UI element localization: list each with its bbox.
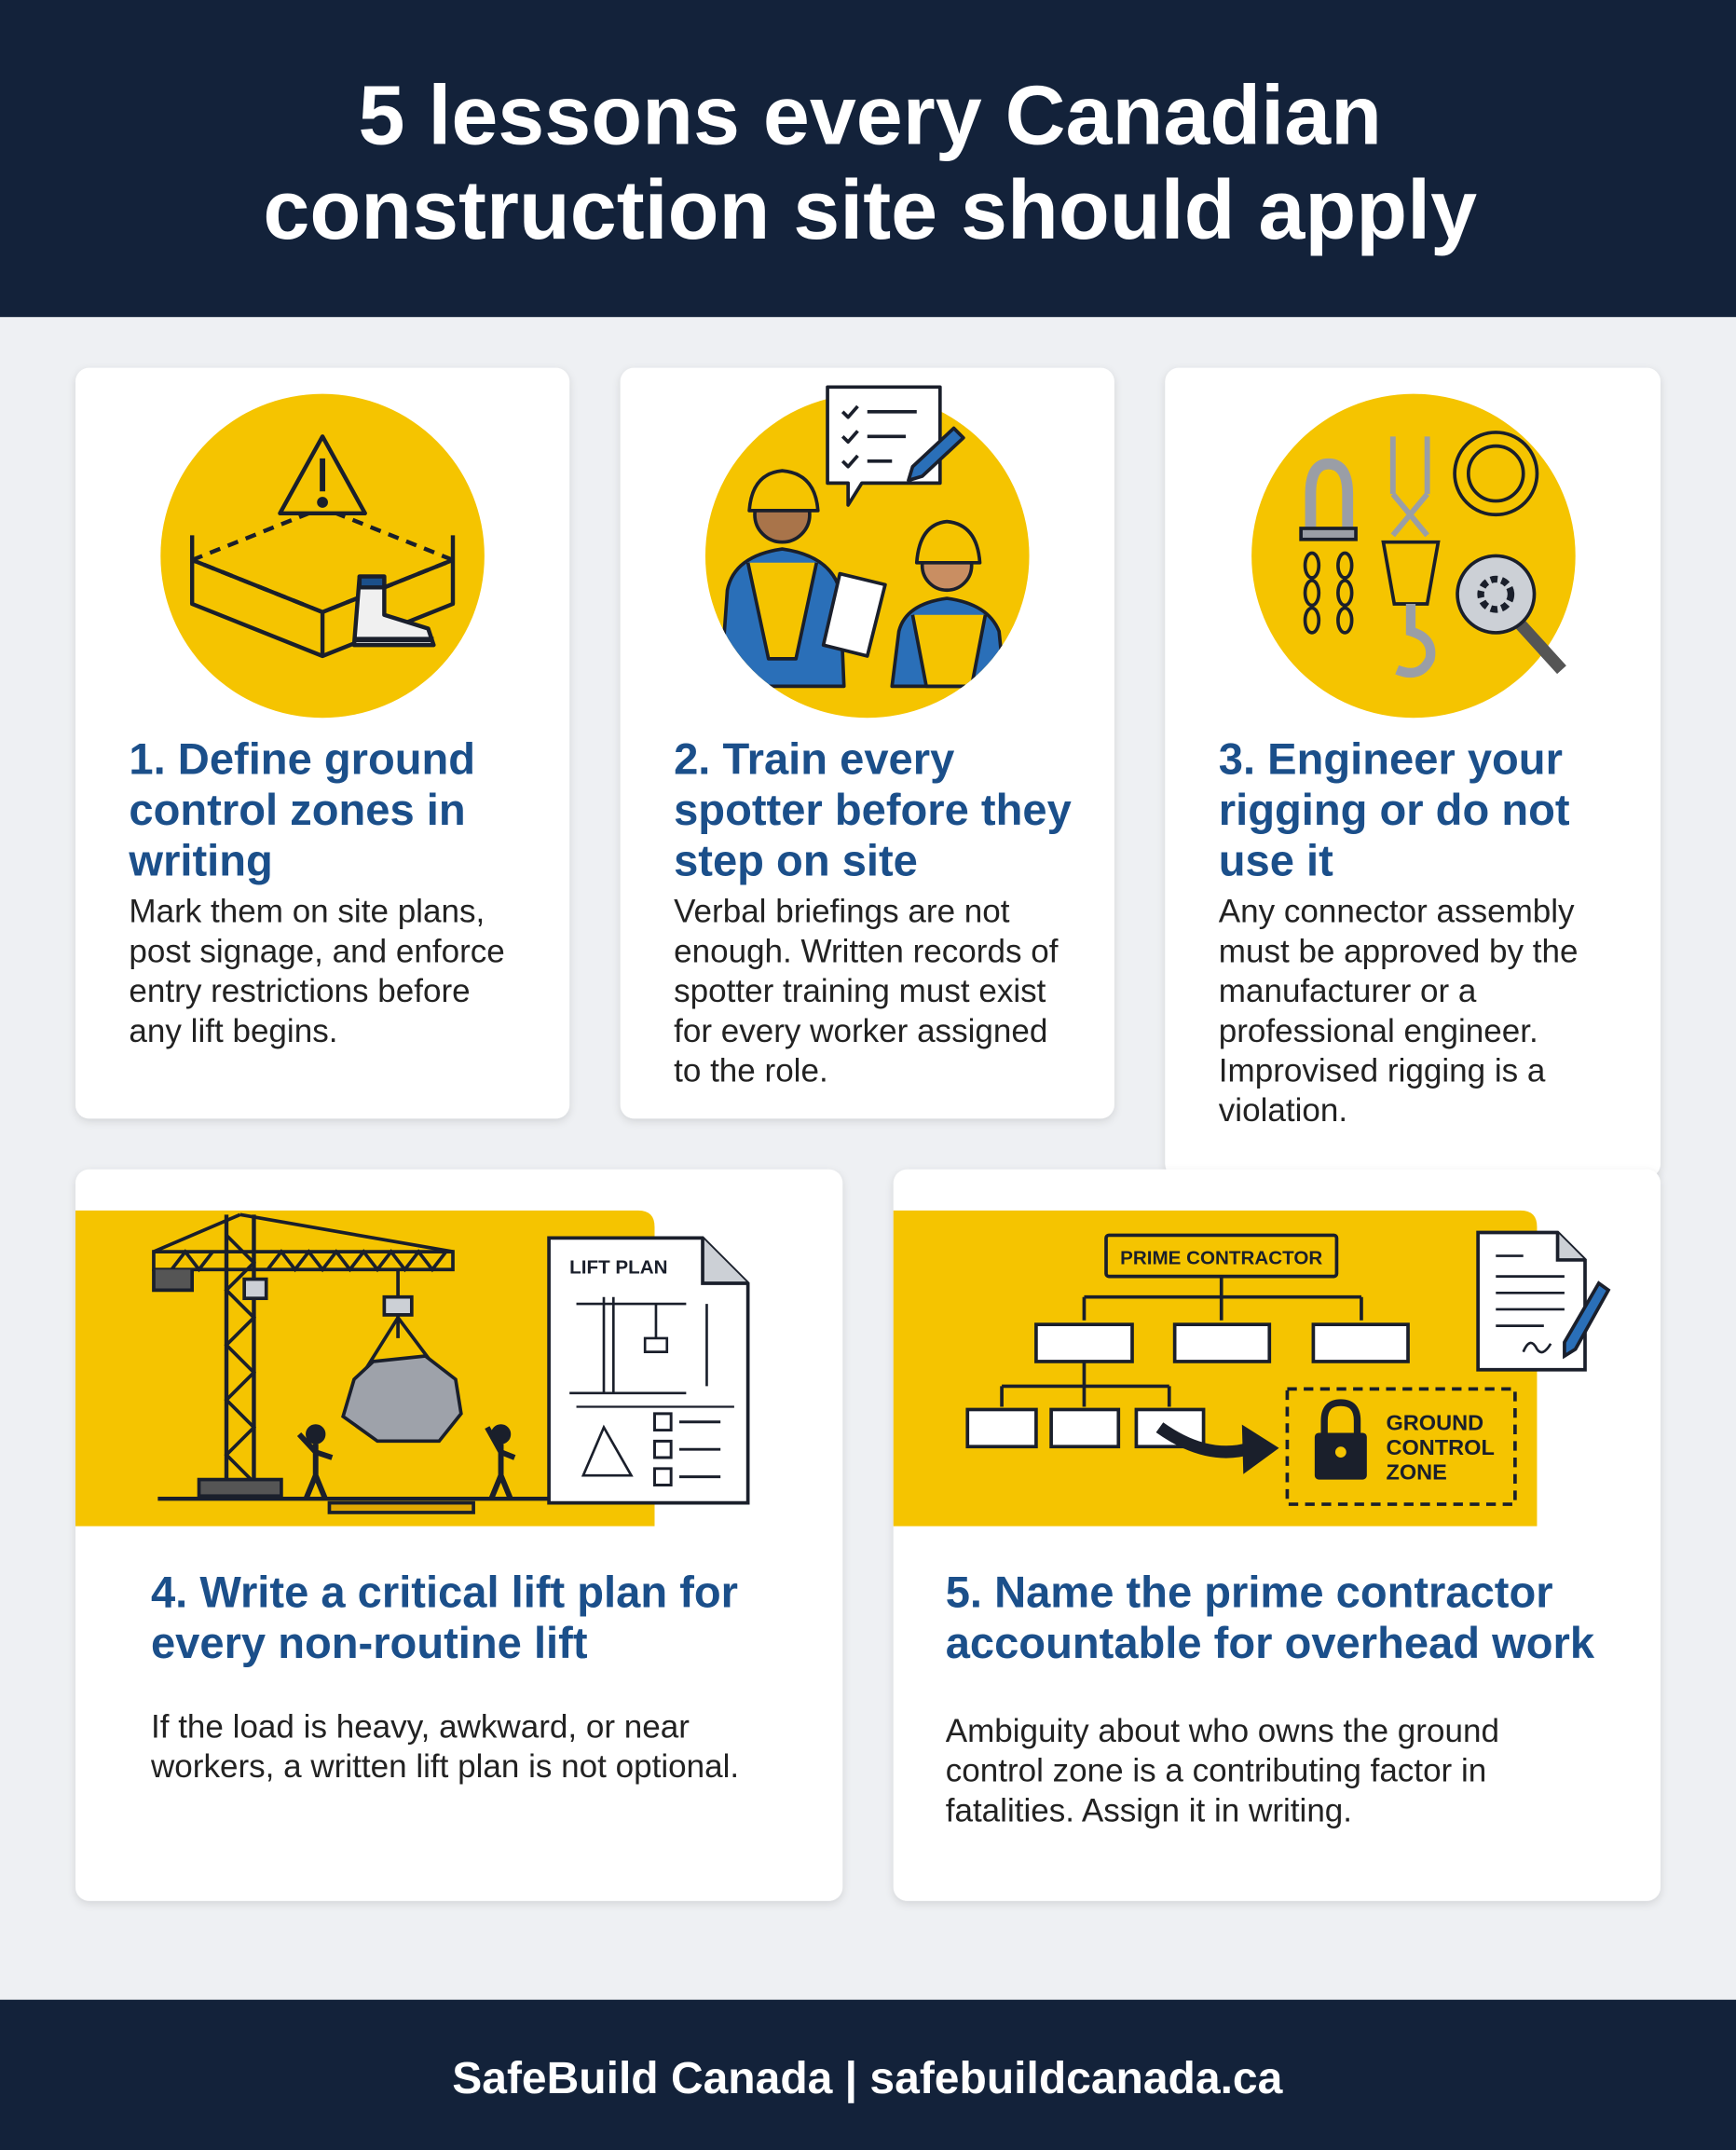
text block 4: workers, a written lift plan is not optional.	[150, 1748, 739, 1785]
text block 1: post signage, and enforce	[129, 933, 505, 969]
text block 3: violation.	[1219, 1092, 1347, 1129]
heading 1: 1. Define ground	[129, 734, 475, 784]
text block 2: to the role.	[674, 1052, 828, 1089]
text block 2: spotter training must exist	[674, 973, 1046, 1009]
text block 2: Verbal briefings are not	[674, 894, 1010, 930]
arrow	[1159, 1425, 1279, 1474]
icon: ground control zone	[160, 394, 485, 718]
panel: card 1	[75, 368, 569, 1118]
icon: signed document	[1478, 1232, 1608, 1370]
panel: card 2	[621, 368, 1114, 1118]
title line 2: construction site should apply	[263, 164, 1477, 257]
icon: spotter training	[705, 387, 1030, 718]
text block 4: If the load is heavy, awkward, or near	[151, 1708, 690, 1745]
org chart	[894, 1211, 1537, 1527]
heading 1: control zones in	[129, 785, 466, 834]
text block 1: Mark them on site plans,	[129, 894, 485, 930]
ground control zone box: CONTROL	[1386, 1435, 1495, 1459]
icon: lift plan document	[549, 1238, 748, 1503]
ground control zone box: GROUND	[1386, 1411, 1483, 1435]
text block 2: enough. Written records of	[674, 933, 1059, 969]
text block 3: must be approved by the	[1219, 933, 1579, 969]
org chart: PRIME CONTRACTOR	[1120, 1247, 1322, 1268]
footer: SafeBuild Canada | safebuildcanada.ca	[452, 2054, 1283, 2103]
illustration: crane lift	[75, 1211, 654, 1527]
heading 5: accountable for overhead work	[946, 1618, 1595, 1667]
header	[0, 0, 1736, 317]
heading 2: spotter before they	[674, 785, 1072, 834]
text block 5: fatalities. Assign it in writing.	[946, 1792, 1352, 1828]
heading 4: 4. Write a critical lift plan for	[151, 1568, 738, 1617]
text block 3: professional engineer.	[1219, 1013, 1538, 1049]
ground control zone box	[1287, 1389, 1515, 1504]
panel: card 3	[1165, 368, 1661, 1178]
panel: card 4	[75, 1170, 842, 1901]
text block 3: manufacturer or a	[1219, 973, 1477, 1009]
icon: lift plan document: LIFT PLAN	[569, 1257, 668, 1279]
text block 1: entry restrictions before	[129, 973, 471, 1009]
text block 1: any lift begins.	[129, 1013, 337, 1049]
text block 2: for every worker assigned	[674, 1013, 1047, 1049]
heading 5: 5. Name the prime contractor	[946, 1568, 1553, 1617]
text block 3: Any connector assembly	[1219, 894, 1575, 930]
heading 1: writing	[128, 836, 273, 885]
text block 5: Ambiguity about who owns the ground	[946, 1713, 1499, 1749]
text block 5: control zone is a contributing factor in	[946, 1753, 1486, 1789]
text block 3: Improvised rigging is a	[1219, 1052, 1546, 1089]
heading 2: 2. Train every	[674, 734, 954, 784]
icon: rigging	[1251, 394, 1576, 718]
title: 5 lessons every Canadian	[358, 70, 1382, 163]
ground control zone box: ZONE	[1386, 1460, 1447, 1485]
heading 3: rigging or do not	[1219, 785, 1570, 834]
heading 4: every non-routine lift	[151, 1618, 588, 1667]
footer	[0, 2000, 1736, 2150]
heading 3: 3. Engineer your	[1219, 734, 1563, 784]
heading 3: use it	[1219, 836, 1333, 885]
heading 2: step on site	[674, 836, 918, 885]
panel: card 5	[894, 1170, 1661, 1901]
